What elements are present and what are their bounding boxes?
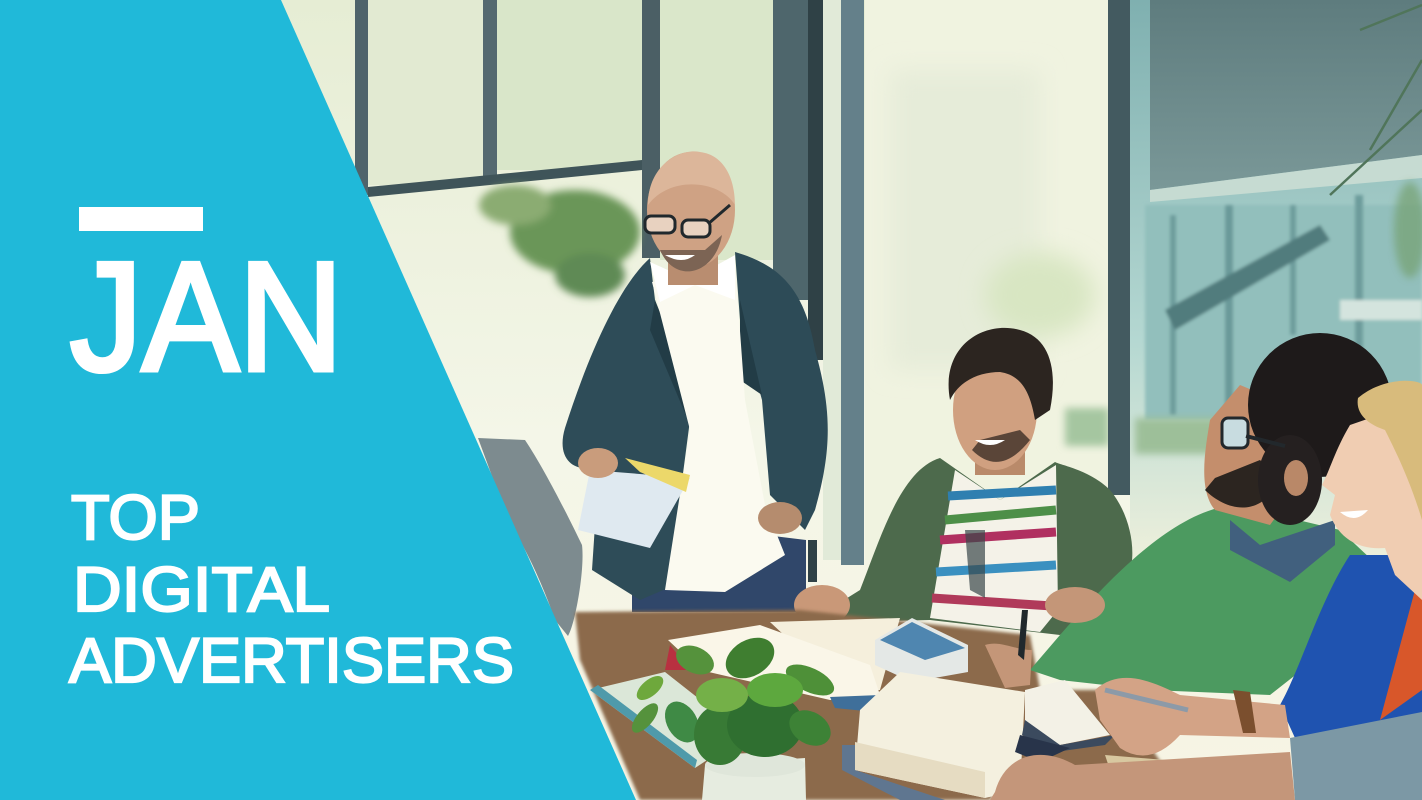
title: ADVERTISERS [69,626,514,696]
title: DIGITAL [73,555,330,625]
month heading with overbar: JAN [70,230,343,403]
potted plant [627,629,839,800]
person: seated man in striped shirt [794,328,1132,635]
head [647,152,735,268]
title [69,483,514,696]
person: grey sleeve at left [478,438,583,636]
jacket [563,258,690,600]
hand with papers [578,470,690,548]
shirt [652,262,785,592]
blue diagonal panel [0,0,636,800]
person: man with afro in green sweater [985,333,1392,695]
person: blonde woman on right [990,381,1422,800]
tree behind the window [479,185,640,297]
neck [668,250,718,285]
glasses [645,216,675,233]
table [575,610,1170,800]
person: standing man [563,151,828,612]
window frames [355,0,1130,582]
title: TOP [71,483,200,553]
books and papers [590,618,1165,800]
jeans [632,530,806,612]
